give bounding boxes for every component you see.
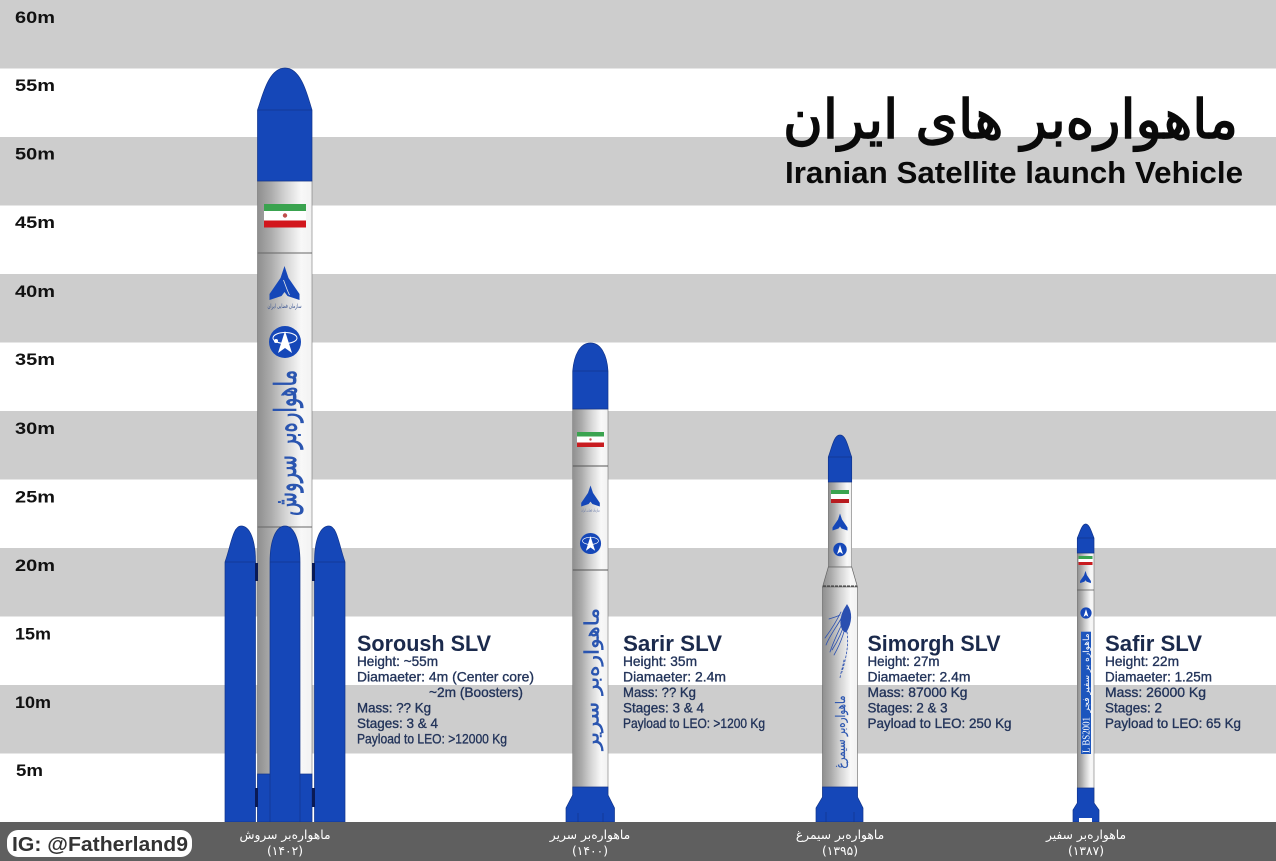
specs: Simorgh: Payload to LEO: 250 Kg	[868, 715, 1012, 731]
caption: Simorgh: ماهواره‌بر سیمرغ	[796, 828, 884, 843]
specs: Safir: Safir SLV	[1105, 631, 1202, 656]
specs: Soroush: Mass: ?? Kg	[357, 700, 431, 716]
caption: Sarir: ماهواره‌بر سریر	[549, 828, 630, 843]
simorgh bird artwork	[825, 605, 851, 678]
specs: Safir: Mass: 26000 Kg	[1105, 684, 1206, 700]
specs: Simorgh: Simorgh SLV	[868, 631, 1001, 656]
vertical Persian name: ماهواره‌بر سریر	[580, 608, 604, 751]
specs: Soroush: ~2m (Boosters)	[429, 684, 523, 700]
height axis labels: 60m	[15, 8, 55, 27]
specs: Sarir: Mass: ?? Kg	[623, 684, 696, 700]
height axis labels: 10m	[15, 693, 51, 712]
height axis labels: 15m	[15, 624, 51, 644]
specs: Soroush: Stages: 3 & 4	[357, 715, 438, 731]
caption: Safir: ماهواره‌بر سفیر	[1045, 828, 1126, 843]
space agency logo: سازمان فضایی ایران	[268, 303, 302, 310]
code on band: L BS2001	[1082, 717, 1092, 753]
specs: Simorgh	[868, 631, 1012, 731]
round emblem	[1080, 607, 1092, 619]
rocket: Soroush	[225, 68, 345, 822]
specs: Safir: Payload to LEO: 65 Kg	[1105, 715, 1241, 731]
specs: Sarir: Height: 35m	[623, 653, 697, 669]
specs: Soroush: Payload to LEO: >12000 Kg	[357, 730, 507, 746]
blue name band	[1081, 632, 1092, 754]
height axis labels: 55m	[15, 76, 55, 95]
height axis labels: 35m	[15, 350, 55, 369]
nose and fairing	[828, 435, 852, 482]
nose and fairing	[1077, 524, 1094, 553]
height axis labels: 20m	[15, 556, 55, 575]
height axis labels: 25m	[15, 488, 55, 506]
nose and fairing	[573, 343, 608, 409]
caption: Safir	[1045, 828, 1126, 858]
rocket: Sarir	[566, 343, 614, 822]
Persian name on band: ماهواره بر سفیر فجر	[1082, 634, 1092, 714]
caption: Sarir: (۱۴۰۰)	[572, 844, 608, 858]
title block	[783, 88, 1243, 190]
specs: Soroush: Soroush SLV	[357, 631, 491, 656]
specs: Simorgh: Mass: 87000 Kg	[868, 684, 968, 700]
center booster	[270, 526, 300, 822]
lower blue section	[258, 774, 312, 822]
flag	[831, 490, 849, 503]
space agency logo: سازمان فضایی ایران	[581, 509, 600, 513]
round emblem	[833, 543, 847, 556]
vertical Persian name: ماهواره‌بر سیمرغ	[834, 696, 849, 768]
English title: Iranian Satellite launch Vehicle	[785, 155, 1243, 190]
space agency logo	[832, 514, 848, 530]
specs: Simorgh: Stages: 2 & 3	[868, 700, 948, 716]
specs: Safir	[1105, 631, 1241, 731]
space agency logo	[268, 266, 302, 310]
height axis labels: 30m	[15, 419, 55, 438]
rocket: Simorgh	[816, 435, 863, 822]
space agency logo	[581, 485, 600, 512]
specs: Safir: Diamaeter: 1.25m	[1105, 668, 1212, 684]
specs: Sarir: Stages: 3 & 4	[623, 700, 704, 716]
caption: Soroush	[239, 828, 331, 858]
core nose and upper fairing	[258, 68, 312, 181]
right booster	[314, 526, 345, 822]
flag	[264, 204, 306, 228]
Persian title: ماهواره‌بر های ایران	[783, 88, 1238, 151]
specs: Sarir: Sarir SLV	[623, 631, 722, 656]
specs: Soroush: Diamaeter: 4m (Center core)	[357, 668, 534, 684]
specs: Soroush: Height: ~55m	[357, 653, 438, 669]
caption: Safir: (۱۳۸۷)	[1068, 844, 1104, 858]
rocket: Safir	[1073, 524, 1099, 822]
height axis labels: 5m	[16, 761, 43, 780]
flag	[577, 432, 604, 447]
bottom strip	[0, 822, 1276, 861]
caption: Soroush: (۱۴۰۲)	[267, 844, 303, 858]
specs: Sarir: Diamaeter: 2.4m	[623, 668, 726, 684]
round emblem	[580, 533, 601, 554]
base and fins	[566, 787, 614, 822]
caption: Sarir	[549, 828, 630, 858]
height axis labels: 50m	[15, 144, 55, 164]
interstage flare	[822, 567, 858, 587]
space agency logo	[1080, 571, 1091, 583]
specs: Sarir	[623, 631, 765, 731]
specs: Safir: Height: 22m	[1105, 653, 1179, 669]
height axis labels: 45m	[15, 213, 55, 232]
core stage body	[258, 181, 312, 822]
base and fins	[816, 787, 863, 822]
watermark: IG: @Fatherland9	[12, 834, 188, 856]
left booster	[225, 526, 256, 822]
specs: Soroush	[357, 631, 534, 746]
body	[573, 409, 608, 822]
flag	[1078, 556, 1092, 565]
specs: Safir: Stages: 2	[1105, 700, 1162, 716]
specs: Simorgh: Diamaeter: 2.4m	[868, 668, 970, 684]
body	[1077, 553, 1094, 822]
caption: Simorgh: (۱۳۹۵)	[822, 844, 858, 858]
base and fins	[1073, 788, 1099, 822]
vertical Persian name: ماهواره‌بر سروش	[269, 370, 304, 516]
height axis labels: 40m	[15, 282, 55, 301]
height axis labels	[15, 8, 55, 780]
specs: Sarir: Payload to LEO: >1200 Kg	[623, 715, 765, 731]
booster attachments	[255, 563, 315, 807]
caption: Simorgh	[796, 828, 884, 858]
specs: Simorgh: Height: 27m	[868, 653, 940, 669]
main body	[822, 587, 858, 822]
caption: Soroush: ماهواره‌بر سروش	[239, 828, 331, 843]
upper stage	[828, 481, 852, 567]
round emblem	[269, 326, 301, 358]
